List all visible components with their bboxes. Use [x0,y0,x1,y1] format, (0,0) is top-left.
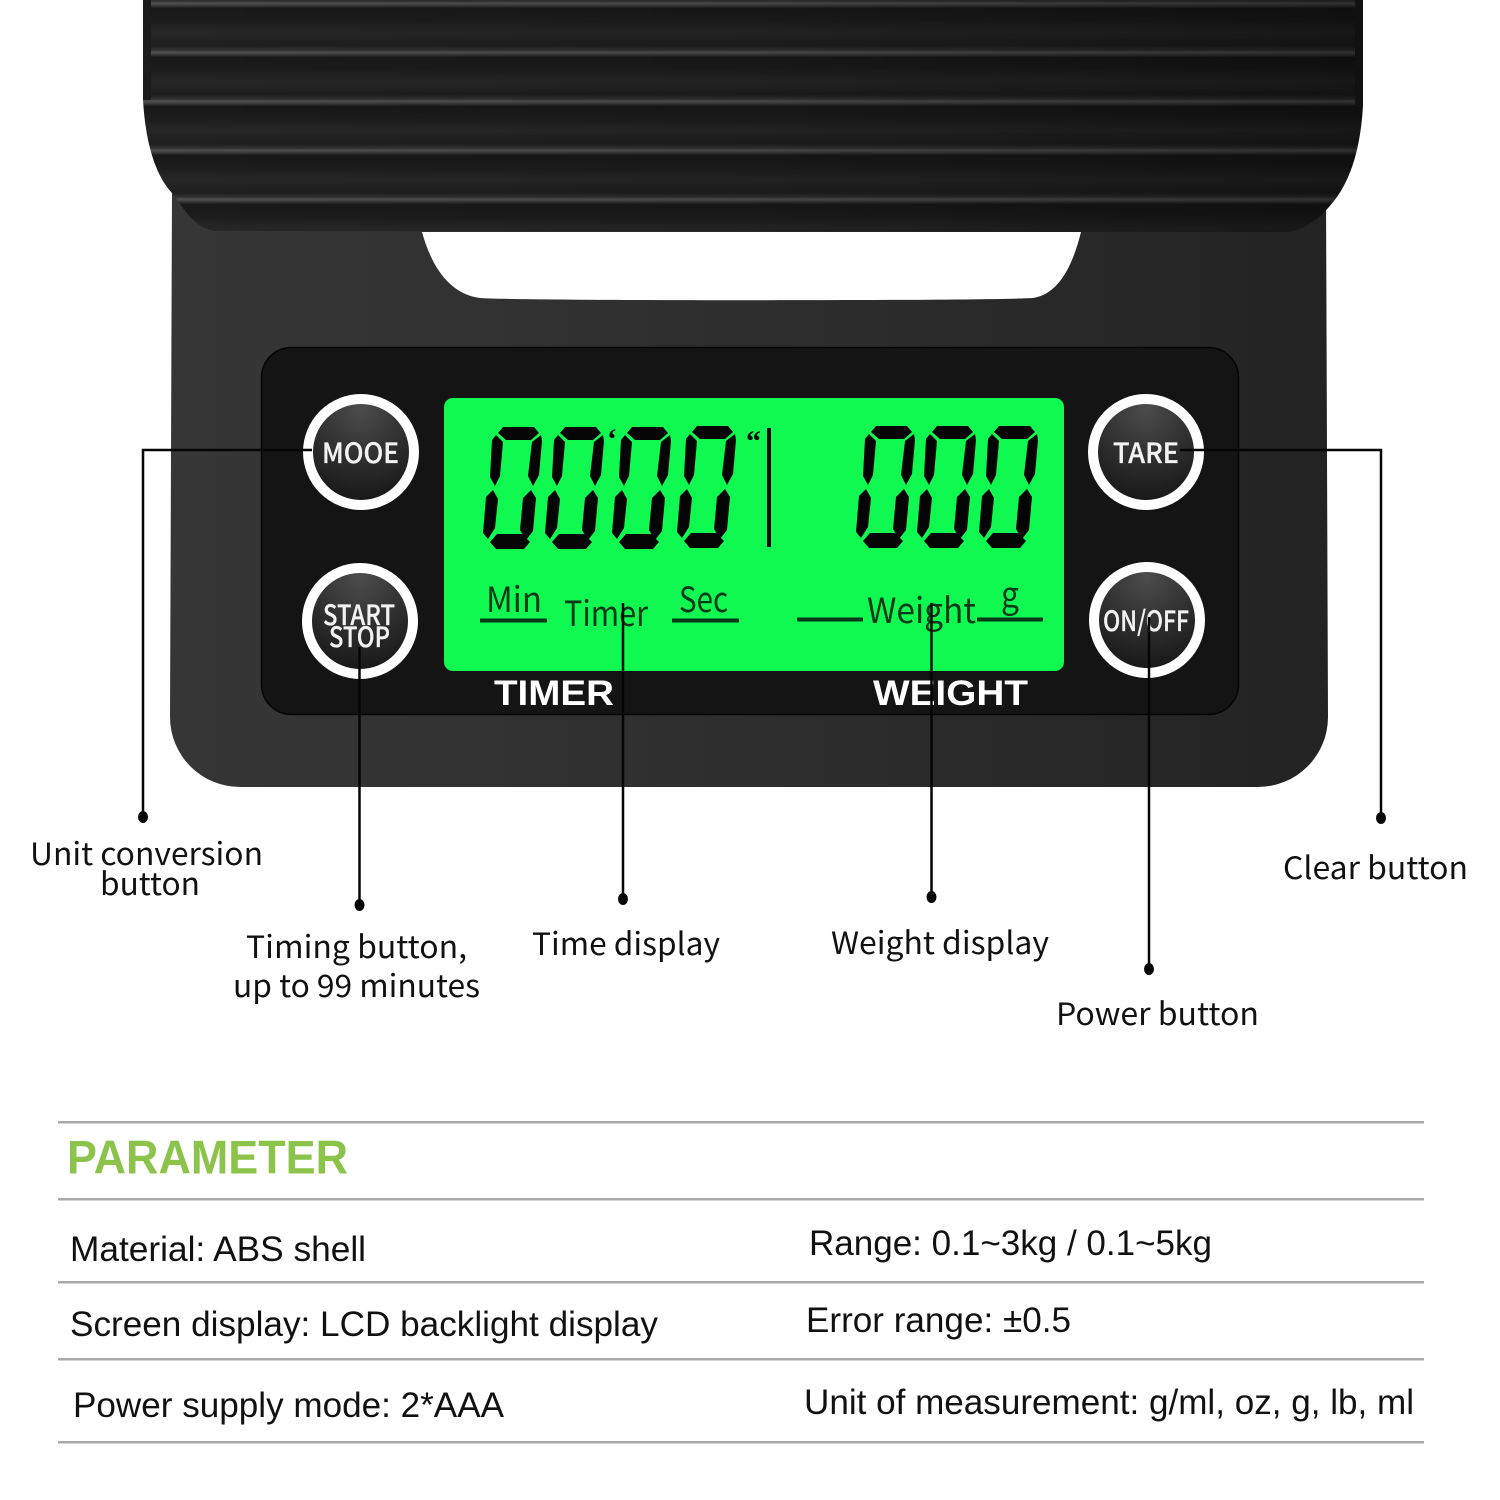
LCD labels: g [1001,567,1019,618]
ribbed top plate [143,0,1363,232]
callout: unit conversion button: button [100,859,200,904]
button: start stop: STOP [329,616,390,656]
callout: unit conversion button: Unit conversion [30,829,263,874]
button: tare: TARE [1113,432,1179,472]
button: mode [308,399,414,505]
button: mode: MOOE [322,432,399,472]
LCD underlines [480,618,1043,622]
divider [767,428,771,547]
button: start stop [307,568,413,674]
callout: timing button: up to 99 minutes [233,961,480,1006]
control panel [262,348,1238,714]
parameter table [58,1121,1424,1444]
LCD labels: Min [486,572,542,623]
LCD labels: Sec [679,572,728,623]
callout: clear button [1180,450,1468,888]
weight digits [856,426,1038,548]
callout: time display [532,603,720,964]
callout: clear button: Clear button [1283,843,1468,888]
callout: timing button: Timing button, [246,922,467,967]
callout: weight display: Weight display [831,918,1049,963]
spec: power supply: Power supply mode: 2*AAA [73,1386,505,1425]
LCD labels: Weight [867,583,976,634]
callout: time display: Time display [532,919,720,964]
spec: unit of measurement: Unit of measurement: g/ml, oz, g, lb, ml [804,1383,1414,1422]
spec: range: Range: 0.1~3kg / 0.1~5kg [809,1224,1212,1263]
button: on off [1094,567,1200,673]
spec: material: Material: ABS shell [70,1230,366,1269]
timer digits [483,426,736,549]
minute and second marks [607,423,761,458]
callout: weight display [831,603,1049,963]
panel caption: timer: TIMER [494,674,614,713]
spec: error range: Error range: ±0.5 [806,1301,1071,1340]
callout: unit conversion button [30,450,312,904]
scale body [170,190,1328,787]
spec: screen display: Screen display: LCD backlight display [70,1305,658,1344]
panel caption: weight: WEIGHT [873,674,1028,713]
minute and second marks: “ [746,425,761,458]
callout: power button [1056,617,1259,1034]
LCD screen [444,398,1064,671]
button: on off: ON/OFF [1103,600,1189,640]
LCD labels [486,567,1019,637]
minute and second marks: ‘ [607,423,617,456]
heading: PARAMETER [67,1130,348,1184]
callout: power button: Power button [1056,989,1259,1034]
callout: timing button [233,647,480,1006]
LCD labels: Timer [564,586,648,637]
button: start stop: START [323,594,395,634]
button: tare [1093,399,1199,505]
